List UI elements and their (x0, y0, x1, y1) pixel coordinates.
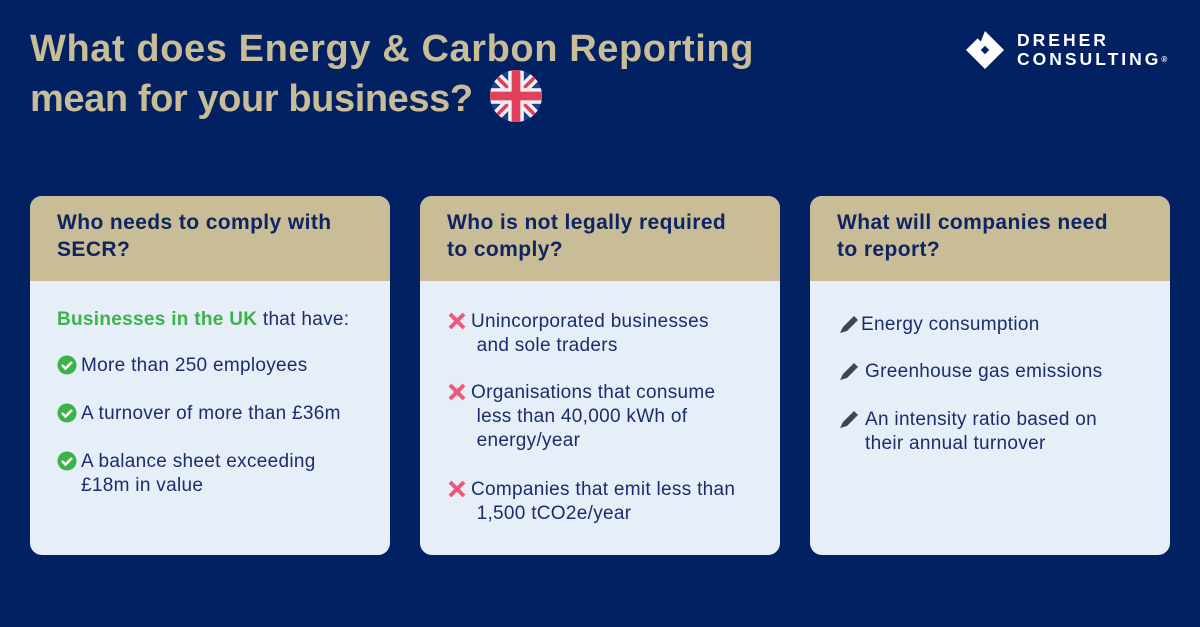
item: 1,500 tCO2e/year (477, 503, 631, 524)
heading (30, 196, 390, 281)
heading (810, 196, 1170, 281)
heading: to report? (837, 238, 940, 261)
item: A turnover of more than £36m (81, 403, 341, 424)
item (448, 479, 735, 524)
title: What does Energy & Carbon Reporting (30, 28, 754, 70)
icon: uk flag (490, 70, 542, 122)
item: Companies that emit less than (471, 479, 735, 500)
item: Unincorporated businesses (471, 311, 709, 332)
title: mean for your business? (30, 78, 473, 120)
panel: what to report (810, 196, 1170, 555)
logo: DREHER (1017, 30, 1109, 50)
item: their annual turnover (865, 433, 1046, 454)
heading: SECR? (57, 238, 130, 261)
item (448, 382, 715, 451)
heading: What will companies need (837, 211, 1108, 234)
item: More than 250 employees (81, 355, 308, 376)
item: Greenhouse gas emissions (865, 361, 1102, 382)
heading: to comply? (447, 238, 563, 261)
intro text: Businesses in the UK that have: (57, 309, 349, 330)
item (448, 311, 709, 356)
item: An intensity ratio based on (865, 409, 1097, 430)
item: £18m in value (81, 475, 203, 496)
icon: logo mark (966, 31, 1004, 69)
item: less than 40,000 kWh of (477, 406, 687, 427)
item: and sole traders (477, 335, 618, 356)
heading: Who is not legally required (447, 211, 726, 234)
logo: CONSULTING® (1017, 49, 1167, 69)
item: Energy consumption (861, 314, 1040, 335)
heading: Who needs to comply with (57, 211, 331, 234)
item: A balance sheet exceeding (81, 451, 316, 472)
title (30, 28, 754, 122)
panel: not required (420, 196, 780, 555)
item: Organisations that consume (471, 382, 715, 403)
item (58, 451, 316, 496)
heading (420, 196, 780, 281)
item: energy/year (477, 430, 580, 451)
logo (966, 30, 1168, 69)
panel: who needs to comply (30, 196, 390, 555)
item (840, 409, 1097, 454)
